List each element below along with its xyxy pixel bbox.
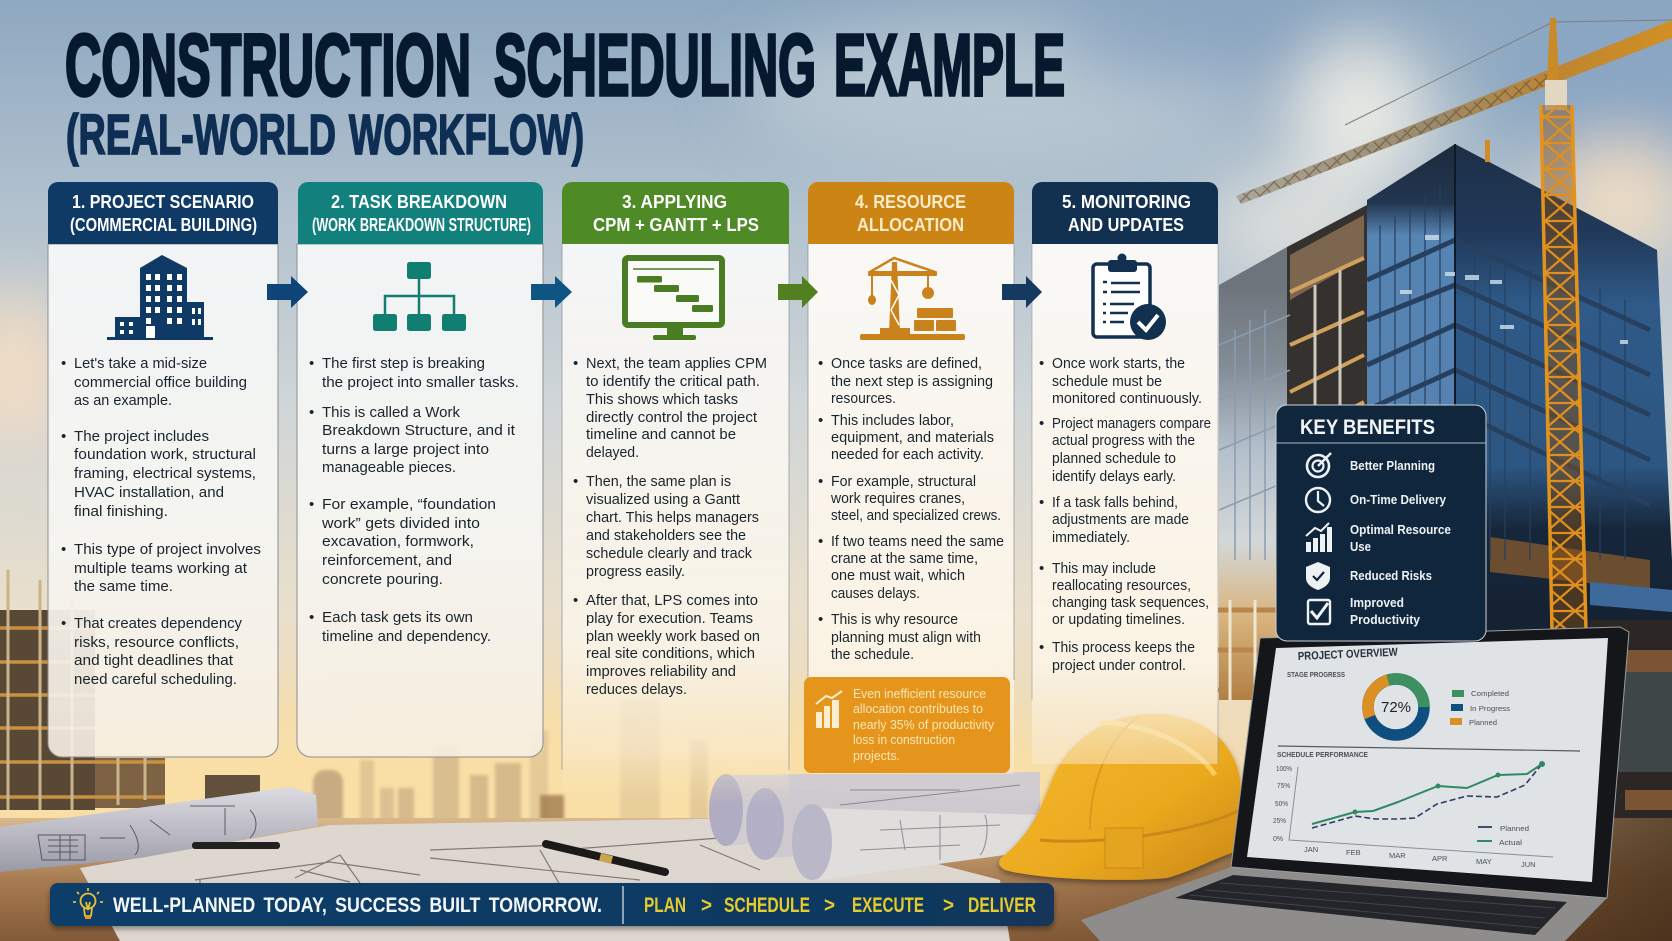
header: monitoring: [1032, 182, 1218, 244]
text: task breakdown bullets: This is called a Work: [322, 404, 460, 421]
benefit: reduced risks: [1306, 562, 1432, 590]
laptop screen bezel: [1231, 627, 1629, 898]
text: resource allocation bullets: crane at the same time,: [831, 550, 978, 567]
text: applying bullets: and stakeholders see the: [586, 527, 746, 544]
text: applying bullets: progress easily.: [586, 563, 685, 580]
title: CONSTRUCTION: [65, 17, 471, 114]
text: monitoring bullets: This process keeps the: [1052, 639, 1195, 656]
text: applying bullets: directly control the project: [586, 409, 758, 426]
dashboard: line chart: [1273, 761, 1553, 869]
callout: productivity statistic: projects.: [853, 749, 900, 763]
text: monitoring bullets: monitored continuously.: [1052, 390, 1202, 407]
text: task breakdown bullets: concrete pouring.: [322, 571, 443, 588]
subtitle: WORKFLOW): [349, 103, 584, 167]
text: applying bullets: Next, the team applies CPM: [586, 355, 767, 372]
text: task breakdown bullets: excavation, formwork,: [322, 533, 474, 550]
arrow: step 2 to 3: [531, 276, 572, 308]
icon: light bulb: [73, 888, 103, 919]
text: project scenario bullets: •: [61, 355, 66, 372]
text: applying bullets: to identify the critical path.: [586, 373, 760, 390]
text: monitoring bullets: •: [1039, 415, 1044, 432]
text: applying bullets: [573, 355, 767, 698]
text: resource allocation bullets: Once tasks are defined,: [831, 355, 982, 372]
icon: office building: [107, 255, 213, 340]
text: resource allocation bullets: work requires cranes,: [830, 490, 965, 507]
text: monitoring bullets: •: [1039, 639, 1044, 656]
text: applying bullets: schedule clearly and track: [586, 545, 752, 562]
text: project scenario bullets: and tight deadlines that: [74, 652, 234, 669]
text: resource allocation bullets: equipment, and materials: [831, 429, 994, 446]
dashboard: line chart: Actual: [1499, 838, 1522, 847]
text: resource allocation bullets: the next step is assigning: [831, 373, 993, 390]
text: task breakdown bullets: work” gets divided into: [321, 515, 480, 532]
text: monitoring bullets: schedule must be: [1052, 373, 1162, 390]
header: resource allocation: 4. RESOURCE: [855, 191, 966, 212]
text: resource allocation bullets: This includes labor,: [831, 412, 954, 429]
text: resource allocation bullets: planning must align with: [831, 629, 981, 646]
dashboard: line chart: MAY: [1476, 857, 1492, 866]
text: task breakdown bullets: For example, “foundation: [322, 496, 496, 513]
text: applying bullets: After that, LPS comes into: [586, 592, 758, 609]
process steps: DELIVER: [968, 894, 1036, 917]
process steps: EXECUTE: [852, 894, 924, 917]
text: task breakdown bullets: •: [309, 355, 314, 372]
panel: 5 monitoring and updates: [1032, 182, 1218, 764]
process steps: SCHEDULE: [724, 894, 810, 917]
header: resource allocation: [808, 182, 1014, 244]
text: applying bullets: reduces delays.: [586, 681, 687, 698]
text: task breakdown bullets: •: [309, 496, 314, 513]
text: task breakdown bullets: the project into smaller tasks.: [322, 374, 519, 391]
text: applying bullets: visualized using a Gantt: [586, 491, 741, 508]
arrow: step 4 to 5: [1002, 276, 1042, 308]
dashboard: donut legend: Planned: [1469, 718, 1497, 727]
text: monitoring bullets: •: [1039, 494, 1044, 511]
blueprint roll: left: [0, 787, 318, 872]
pen: left: [192, 842, 280, 849]
text: task breakdown bullets: •: [309, 404, 314, 421]
text: project scenario bullets: [61, 355, 261, 688]
text: resource allocation bullets: resources.: [831, 390, 896, 407]
benefit: on-time delivery: On-Time Delivery: [1350, 493, 1446, 507]
text: resource allocation bullets: •: [818, 611, 823, 628]
process steps: PLAN: [644, 894, 686, 917]
background: distant skyline: [313, 700, 708, 830]
text: monitoring bullets: [1039, 355, 1211, 674]
text: monitoring bullets: planned schedule to: [1052, 450, 1176, 467]
title: EXAMPLE: [834, 17, 1065, 114]
benefit: optimal resource use: Optimal Resource: [1350, 523, 1451, 537]
text: applying bullets: play for execution. Teams: [586, 610, 753, 627]
callout: productivity statistic: allocation contributes to: [853, 702, 983, 716]
benefit: better planning: Better Planning: [1350, 459, 1435, 473]
benefit: improved productivity: Improved: [1350, 596, 1404, 610]
text: task breakdown bullets: •: [309, 609, 314, 626]
dashboard: donut legend: Completed: [1471, 689, 1509, 698]
text: monitoring bullets: Once work starts, the: [1052, 355, 1185, 372]
title: SCHEDULING: [494, 17, 816, 114]
text: monitoring bullets: project under control.: [1052, 657, 1186, 674]
text: project scenario bullets: commercial office building: [74, 374, 247, 391]
dashboard: line chart: 100%: [1276, 764, 1292, 773]
dashboard: line chart: MAR: [1389, 851, 1406, 860]
dashboard: line chart: APR: [1432, 854, 1448, 863]
laptop screen: [1247, 638, 1608, 882]
panel: 2 task breakdown: [297, 182, 543, 757]
header: task breakdown: (WORK BREAKDOWN STRUCTURE): [312, 214, 531, 235]
text: resource allocation bullets: This is why resource: [831, 611, 958, 628]
text: monitoring bullets: •: [1039, 355, 1044, 372]
text: project scenario bullets: That creates dependency: [74, 615, 242, 632]
text: applying bullets: plan weekly work based on: [586, 628, 760, 645]
dashboard: stage progress label: STAGE PROGRESS: [1287, 670, 1345, 679]
text: resource allocation bullets: •: [818, 473, 823, 490]
dashboard: donut legend: [1450, 689, 1510, 727]
text: project scenario bullets: HVAC installation, and: [74, 484, 224, 501]
text: task breakdown bullets: [309, 355, 519, 645]
icon: monitor with gantt chart: [625, 258, 722, 340]
background: glass building under construction: [1218, 144, 1672, 910]
process steps: >: [701, 894, 712, 917]
dashboard: line chart: 50%: [1275, 799, 1288, 808]
callout: productivity statistic: [804, 677, 1010, 773]
text: project scenario bullets: the same time.: [74, 578, 173, 595]
text: applying bullets: chart. This helps managers: [586, 509, 759, 526]
benefit: optimal resource use: Use: [1350, 540, 1371, 554]
header: monitoring: AND UPDATES: [1068, 214, 1184, 235]
benefit: improved productivity: [1308, 596, 1420, 627]
icon: crane with materials: [860, 258, 965, 340]
header: project scenario: 1. PROJECT SCENARIO: [72, 191, 254, 212]
text: project scenario bullets: The project includes: [74, 428, 209, 445]
text: project scenario bullets: as an example.: [74, 392, 172, 409]
text: monitoring bullets: changing task sequences,: [1052, 594, 1209, 611]
text: task breakdown bullets: Breakdown Structure, and it: [322, 422, 516, 439]
text: applying bullets: •: [573, 592, 578, 609]
dashboard: donut chart: [1368, 679, 1424, 735]
header: project scenario: [48, 182, 278, 244]
dashboard: line chart: 75%: [1277, 781, 1290, 790]
text: project scenario bullets: foundation work, structural: [74, 446, 256, 463]
laptop: [1081, 627, 1629, 941]
dashboard: line chart: Planned: [1500, 824, 1529, 833]
text: project scenario bullets: final finishing.: [74, 503, 168, 520]
benefit: improved productivity: Productivity: [1350, 613, 1420, 627]
text: project scenario bullets: •: [61, 541, 66, 558]
text: monitoring bullets: Project managers compare: [1052, 415, 1211, 432]
process steps: [644, 894, 1036, 917]
dashboard: line chart: 0%: [1273, 834, 1283, 843]
dashboard: line chart: JAN: [1304, 845, 1318, 854]
text: resource allocation bullets: the schedule.: [831, 646, 914, 663]
background: desk surface: [0, 818, 1672, 941]
callout: productivity statistic: nearly 35% of productivity: [853, 718, 995, 732]
text: task breakdown bullets: timeline and dependency.: [322, 628, 491, 645]
text: monitoring bullets: actual progress with the: [1052, 432, 1195, 449]
text: resource allocation bullets: causes delays.: [831, 585, 920, 602]
header: task breakdown: [298, 182, 543, 244]
text: resource allocation bullets: If two teams need the same: [831, 533, 1004, 550]
process steps: >: [943, 894, 954, 917]
text: monitoring bullets: If a task falls behind,: [1052, 494, 1178, 511]
header: applying: 3. APPLYING: [622, 191, 727, 212]
text: applying bullets: Then, the same plan is: [586, 473, 731, 490]
dashboard: line chart: FEB: [1346, 848, 1361, 857]
dashboard: project overview heading: PROJECT OVERVIEW: [1298, 647, 1398, 663]
header: applying: CPM + GANTT + LPS: [593, 214, 759, 235]
arrow: step 3 to 4: [778, 276, 818, 308]
callout: productivity statistic: loss in construction: [853, 733, 955, 747]
panel: 1 project scenario: [48, 182, 278, 757]
text: resource allocation bullets: [818, 355, 1004, 663]
text: project scenario bullets: This type of project involves: [74, 541, 261, 558]
text: project scenario bullets: •: [61, 428, 66, 445]
panel: key benefits: [1276, 405, 1486, 641]
dashboard: schedule performance label: SCHEDULE PERFORMANCE: [1277, 750, 1368, 759]
heading: key benefits: KEY BENEFITS: [1300, 416, 1435, 439]
benefit: better planning: [1307, 453, 1435, 477]
text: project scenario bullets: •: [61, 615, 66, 632]
header: monitoring: 5. MONITORING: [1062, 191, 1191, 212]
text: task breakdown bullets: Each task gets its own: [322, 609, 473, 626]
text: applying bullets: This shows which tasks: [586, 391, 738, 408]
text: monitoring bullets: This may include: [1052, 560, 1156, 577]
text: resource allocation bullets: steel, and specialized crews.: [831, 507, 1001, 524]
pen: right: [546, 844, 665, 872]
text: project scenario bullets: multiple teams working at: [74, 560, 248, 577]
text: project scenario bullets: risks, resource conflicts,: [74, 634, 239, 651]
dashboard: line chart: 25%: [1273, 816, 1286, 825]
text: monitoring bullets: identify delays early.: [1052, 468, 1176, 485]
text: project scenario bullets: need careful scheduling.: [74, 671, 237, 688]
text: monitoring bullets: immediately.: [1052, 529, 1130, 546]
text: monitoring bullets: or updating timelines.: [1052, 611, 1185, 628]
text: project scenario bullets: framing, electrical systems,: [74, 465, 256, 482]
header: task breakdown: 2. TASK BREAKDOWN: [331, 191, 507, 212]
dashboard: donut chart: 72%: [1381, 699, 1411, 716]
text: task breakdown bullets: turns a large project into: [322, 441, 489, 458]
text: resource allocation bullets: •: [818, 412, 823, 429]
background: tower crane: [1236, 18, 1672, 630]
text: project scenario bullets: Let's take a mid-size: [74, 355, 207, 372]
icon: clipboard with check: [1093, 254, 1166, 340]
callout: productivity statistic: Even inefficient resource: [853, 687, 986, 701]
text: resource allocation bullets: •: [818, 355, 823, 372]
background: left construction frame: [0, 570, 260, 810]
text: applying bullets: real site conditions, which: [586, 645, 755, 662]
benefit: optimal resource use: [1306, 523, 1451, 554]
text: applying bullets: •: [573, 473, 578, 490]
text: resource allocation bullets: needed for each activity.: [831, 446, 984, 463]
tagline: WELL-PLANNED TODAY, SUCCESS BUILT TOMORROW.: [113, 894, 602, 917]
panel: 3 applying CPM Gantt LPS: [562, 182, 789, 804]
header: project scenario: (COMMERCIAL BUILDING): [70, 214, 257, 235]
text: monitoring bullets: •: [1039, 560, 1044, 577]
text: resource allocation bullets: •: [818, 533, 823, 550]
benefit: on-time delivery: [1306, 488, 1446, 512]
icon: rising bar chart: [816, 691, 842, 728]
subtitle: (REAL-WORLD: [66, 103, 336, 167]
text: task breakdown bullets: reinforcement, and: [322, 552, 452, 569]
arrow: step 1 to 2: [267, 276, 308, 308]
header: applying: [562, 182, 789, 244]
blueprint rolls: right: [709, 772, 1042, 880]
hard hat: [999, 714, 1241, 880]
text: applying bullets: timeline and cannot be: [586, 426, 736, 443]
icon: org chart: [373, 262, 466, 331]
text: applying bullets: delayed.: [586, 444, 639, 461]
text: task breakdown bullets: The first step is breaking: [322, 355, 485, 372]
text: applying bullets: •: [573, 355, 578, 372]
banner: tagline and process: [50, 883, 1054, 926]
dashboard: donut legend: In Progress: [1470, 704, 1510, 713]
panel: 4 resource allocation: [804, 182, 1014, 774]
text: applying bullets: improves reliability and: [586, 663, 736, 680]
dashboard: line chart: JUN: [1521, 860, 1536, 869]
text: resource allocation bullets: For example, structural: [831, 473, 976, 490]
text: task breakdown bullets: manageable pieces.: [322, 459, 456, 476]
header: resource allocation: ALLOCATION: [857, 214, 964, 235]
laptop base and keyboard: [1081, 867, 1607, 941]
text: resource allocation bullets: one must wait, which: [831, 567, 965, 584]
benefit: reduced risks: Reduced Risks: [1350, 569, 1432, 583]
process steps: >: [824, 894, 835, 917]
text: monitoring bullets: adjustments are made: [1052, 511, 1189, 528]
text: monitoring bullets: reallocating resources,: [1052, 577, 1191, 594]
